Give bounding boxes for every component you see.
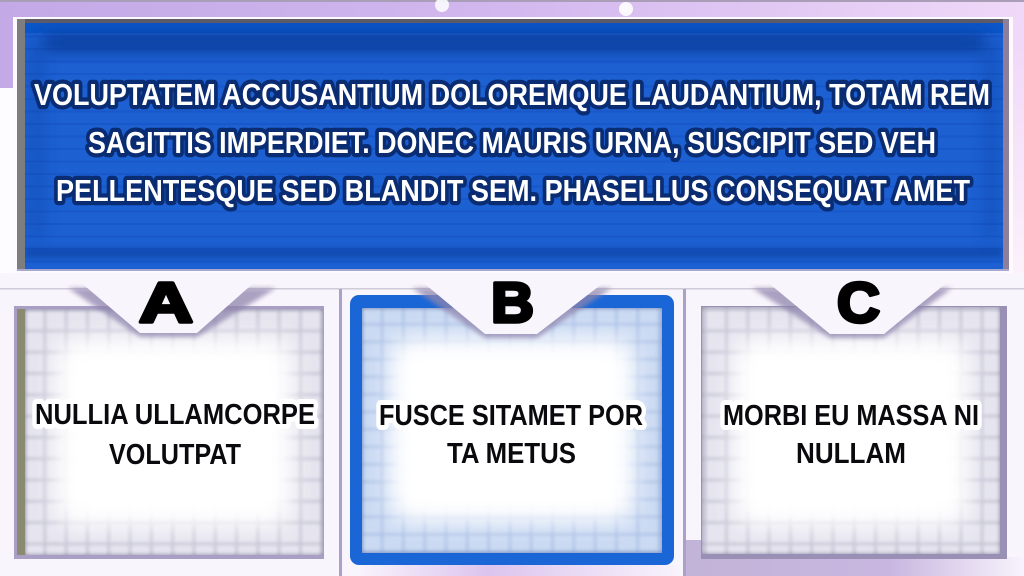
- answer B text: TA METUS: [447, 438, 576, 470]
- answer B text: FUSCE SITAMET POR: [379, 400, 643, 432]
- lower frame strip: [0, 269, 1024, 576]
- tab: letter B: [412, 271, 612, 338]
- board frame: [13, 17, 1013, 273]
- answer C text: NULLAM: [796, 438, 906, 470]
- panel: answer C: [701, 306, 1007, 559]
- tab: letter C: C: [837, 271, 880, 335]
- panel: question board: [13, 17, 1013, 273]
- panel: answer B (selected): [340, 290, 684, 570]
- answer C window: [701, 306, 1007, 559]
- question text: [34, 77, 990, 208]
- tab: letter A: [68, 271, 276, 337]
- tab: letter B: B: [491, 271, 534, 335]
- answer C text: [723, 400, 979, 470]
- answer B text: [379, 400, 643, 470]
- answer A text: [35, 399, 315, 471]
- answer A text: NULLIA ULLAMCORPE: [35, 399, 315, 431]
- panel: answer A: [14, 306, 324, 559]
- tab: letter A: A: [139, 271, 193, 335]
- board blue field: [25, 23, 1003, 269]
- answer A text: VOLUTPAT: [109, 439, 241, 471]
- answer B window: [340, 290, 684, 570]
- answer A window: [14, 306, 324, 559]
- tab: letter C: [752, 271, 952, 338]
- answer C text: MORBI EU MASSA NI: [723, 400, 979, 432]
